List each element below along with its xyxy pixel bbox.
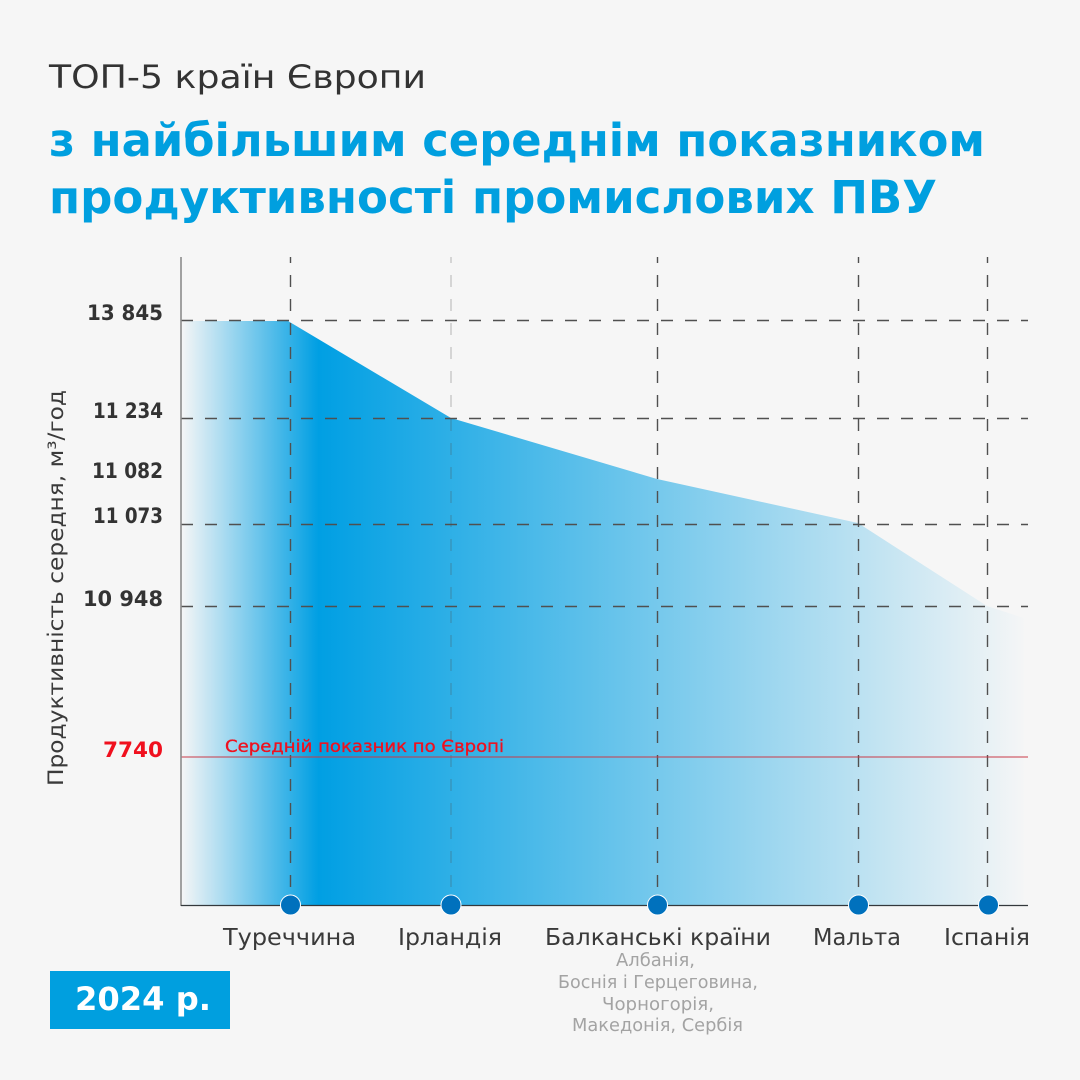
y axis values: 11 082: [92, 459, 163, 483]
y axis values: 11 073: [93, 504, 163, 528]
horizontal value gridlines: [181, 320, 1028, 606]
Balkan countries list: Чорногорія,: [602, 995, 714, 1015]
country labels: Ірландія: [398, 925, 502, 951]
y axis values: 7740: [103, 738, 163, 762]
country labels: [222, 925, 1030, 951]
title: main heading: з найбільшим середнім показником: [49, 114, 985, 167]
y axis values: 10 948: [83, 587, 163, 611]
country markers: [280, 895, 998, 915]
Balkan countries list: [558, 951, 758, 1036]
x axis: [181, 904, 1028, 906]
country labels: Туреччина: [222, 925, 356, 951]
European average label: Середній показник по Європі: [225, 737, 504, 757]
title: main heading: [49, 114, 985, 224]
year badge: [50, 971, 230, 1029]
year badge: 2024 р.: [75, 980, 211, 1018]
European average line: [181, 756, 1028, 758]
area chart: [181, 257, 1028, 915]
y axis values: 11 234: [93, 399, 163, 423]
country labels: Іспанія: [944, 925, 1030, 951]
Balkan countries list: Албанія,: [616, 951, 695, 971]
y axis: [180, 257, 182, 906]
Balkan countries list: Боснія і Герцеговина,: [558, 973, 758, 993]
chart area fill: [181, 321, 1024, 905]
vertical country gridlines: [290, 257, 988, 890]
y axis title: Продуктивність середня, м³/год: [44, 390, 68, 786]
Balkan countries list: Македонія, Сербія: [572, 1016, 743, 1036]
title: main heading: продуктивності промислових ПВУ: [49, 171, 937, 224]
y axis values: 13 845: [87, 301, 163, 325]
country labels: Мальта: [813, 925, 901, 951]
country labels: Балканські країни: [545, 925, 771, 951]
y axis values: [83, 301, 163, 762]
title: intro line: ТОП-5 країн Європи: [48, 58, 426, 96]
